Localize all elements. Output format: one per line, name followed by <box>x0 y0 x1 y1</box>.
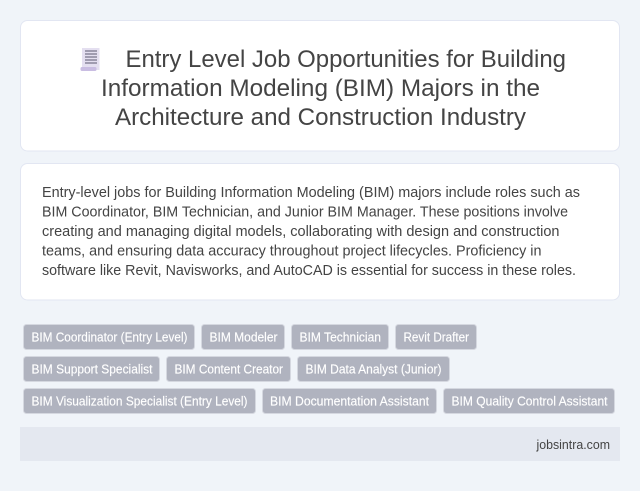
tag: BIM Data Analyst: BIM Data Analyst (Junior) <box>306 362 442 376</box>
tag: BIM Technician: BIM Technician <box>300 330 381 344</box>
text block: description <box>42 185 580 279</box>
tag: BIM Coordinator <box>24 324 194 350</box>
tag group: job titles <box>24 324 614 414</box>
title: Architecture and Construction Industry <box>115 104 526 131</box>
tag: BIM Documentation Assistant <box>262 388 436 414</box>
footer <box>20 427 620 461</box>
footer: jobsintra.com <box>536 438 610 452</box>
tag: BIM Modeler <box>202 324 284 350</box>
tag: BIM Quality Control Assistant <box>444 388 614 414</box>
tag: BIM Content Creator: BIM Content Creator <box>174 362 283 376</box>
tag: BIM Support Specialist <box>24 356 160 382</box>
text block: description: software like Revit, Navisworks, and AutoCAD is essential for success in these roles. <box>42 263 576 279</box>
tag: BIM Data Analyst <box>298 356 450 382</box>
tag: BIM Visualization Specialist: BIM Visualization Specialist (Entry Level) <box>32 394 248 408</box>
icon: document scroll <box>80 48 100 71</box>
tag: BIM Content Creator <box>166 356 290 382</box>
text block: description: creating and managing digital models, collaborating with design and construction <box>42 224 560 240</box>
tag: BIM Support Specialist: BIM Support Specialist <box>32 362 153 376</box>
tag: BIM Modeler: BIM Modeler <box>210 330 278 344</box>
tag: BIM Coordinator: BIM Coordinator (Entry Level) <box>32 330 188 344</box>
tag: BIM Visualization Specialist <box>24 388 256 414</box>
text block: description: teams, and ensuring data accuracy throughout project lifecycles. Proficiency in <box>42 244 542 260</box>
panel: description <box>20 164 620 300</box>
title: Entry Level Job Opportunities for Building <box>126 46 566 73</box>
tag: Revit Drafter <box>396 324 476 350</box>
tag: Revit Drafter: Revit Drafter <box>404 330 469 344</box>
tag: BIM Quality Control Assistant: BIM Quality Control Assistant <box>452 394 608 408</box>
tag: BIM Documentation Assistant: BIM Documentation Assistant <box>270 394 429 408</box>
tag: BIM Technician <box>292 324 388 350</box>
panel: title card <box>20 20 620 151</box>
text block: description: Entry-level jobs for Building Information Modeling (BIM) majors include roles such as <box>42 185 580 201</box>
title: Information Modeling (BIM) Majors in the <box>101 75 540 102</box>
title <box>101 46 566 131</box>
text block: description: BIM Coordinator, BIM Technician, and Junior BIM Manager. These positions involve <box>42 204 568 220</box>
